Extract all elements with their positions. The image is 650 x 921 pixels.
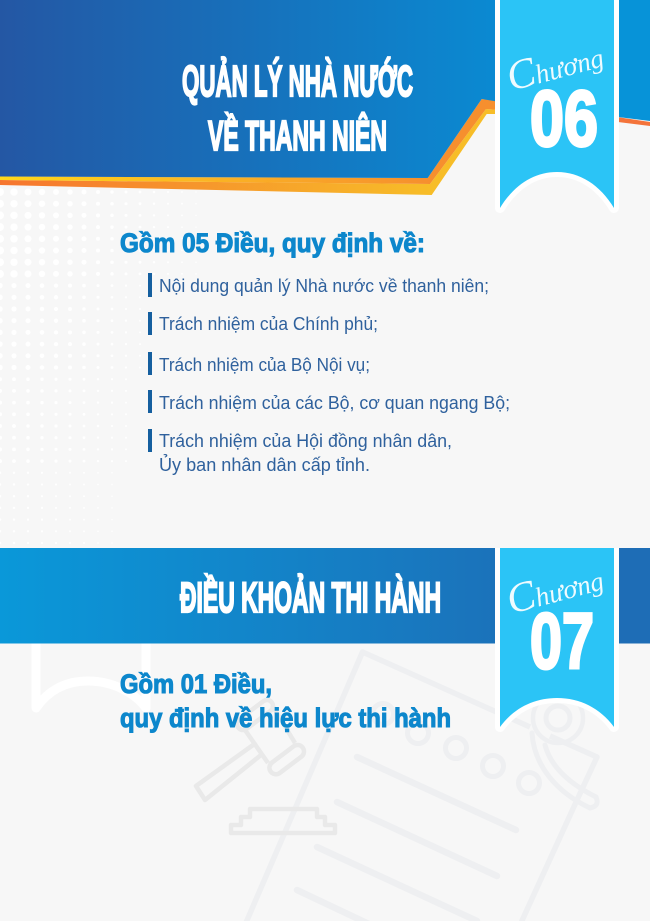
chapter number 06: 06 [530,74,598,162]
chapter 07 heading [120,669,451,733]
chapter 06 title: VỀ THANH NIÊN [208,111,387,159]
white dot pattern [0,192,196,545]
watermark: document [245,652,597,921]
chapter label script: Chương [502,31,608,101]
chapter label script: Chương [502,554,608,624]
chapter 07 heading: Gồm 01 Điều, [120,669,272,699]
list of provisions [148,273,510,475]
item 5: Ủy ban nhân dân cấp tỉnh. [159,454,370,475]
banner lower stripe [0,109,500,195]
ribbon shape [500,548,614,727]
chapter 06 heading: Gồm 05 Điều, quy định về: [120,228,425,258]
chapter 06 title [182,56,413,159]
bottom banner [0,548,650,644]
banner right panel [610,0,650,121]
banner blue panel [0,548,500,644]
item 4: Trách nhiệm của các Bộ, cơ quan ngang Bộ; [159,392,510,413]
top banner [0,0,650,195]
item 2: Trách nhiệm của Chính phủ; [159,313,378,334]
item 5: Trách nhiệm của Hội đồng nhân dân, [159,430,452,451]
banner right panel [610,548,650,644]
top cover [490,540,624,548]
chapter 06 title: QUẢN LÝ NHÀ NƯỚC [182,56,413,106]
banner upper stripe [0,99,500,184]
ribbon chapter 07 [490,540,624,727]
chapter 07 heading: quy định về hiệu lực thi hành [120,703,451,733]
ribbon chapter 06 [500,0,614,208]
chapter number 07: 07 [530,596,594,685]
ribbon shape [500,0,614,208]
watermark: gavel [196,698,335,833]
item 1: Nội dung quản lý Nhà nước về thanh niên; [159,275,489,296]
banner blue panel [0,0,500,178]
item 5 [148,429,452,475]
item 3: Trách nhiệm của Bộ Nội vụ; [159,354,370,375]
banner right stripe [610,116,650,126]
watermark: white ribbon outline [36,643,146,708]
